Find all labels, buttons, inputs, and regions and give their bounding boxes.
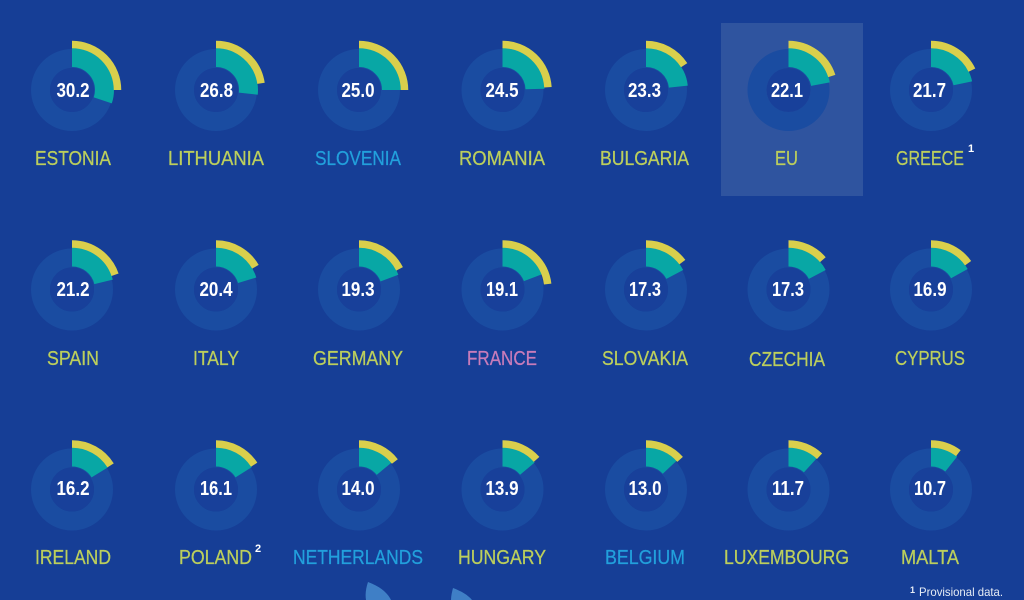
gauge: France (457, 244, 548, 370)
gauge: Netherlands: NETHERLANDS (293, 547, 423, 569)
gauge: Germany (313, 244, 404, 370)
gauge: Hungary (457, 444, 548, 569)
gauge: Italy: ITALY (193, 348, 239, 370)
gauge: Lithuania: LITHUANIA (168, 148, 265, 170)
gauge: Greece: 1 (968, 143, 974, 155)
gauge: Greece: GREECE (896, 148, 964, 170)
gauge: Poland: POLAND (179, 547, 252, 569)
gauge: Romania (457, 44, 548, 170)
footnote: 1 (910, 585, 915, 595)
gauge: Estonia: 30.2 (56, 80, 90, 102)
gauge: Poland: 2 (255, 543, 261, 555)
gauge: Romania: ROMANIA (459, 148, 546, 170)
gauge: France: FRANCE (467, 348, 537, 370)
gauge: Slovenia (314, 44, 404, 170)
gauge: Lithuania (168, 44, 265, 170)
gauge: Hungary: HUNGARY (458, 547, 546, 569)
gauge: France: 19.1 (486, 279, 518, 301)
gauge: EU: EU (775, 148, 798, 170)
gauge: Slovenia: SLOVENIA (315, 148, 402, 170)
gauge: Spain (26, 244, 118, 370)
gauge: Belgium: BELGIUM (605, 547, 685, 569)
gauge: Spain: 21.2 (56, 279, 90, 301)
gauge: Belgium (600, 444, 692, 569)
gauge: Malta (886, 444, 976, 569)
gauge: Bulgaria (600, 44, 692, 170)
gauge: Greece: 21.7 (913, 80, 946, 102)
gauge: Greece (886, 44, 976, 170)
gauge: EU (743, 44, 834, 170)
gauge: Slovakia: SLOVAKIA (602, 348, 689, 370)
gauge: Ireland: 16.2 (56, 478, 90, 500)
gauge: Ireland: IRELAND (35, 547, 111, 569)
gauge: Czechia: CZECHIA (749, 349, 826, 371)
gauge: Cyprus: CYPRUS (895, 348, 965, 370)
gauge: Hungary: 13.9 (486, 478, 518, 500)
gauge: Malta: 10.7 (914, 478, 946, 500)
gauge: Luxembourg (724, 444, 849, 569)
gauge: Estonia: ESTONIA (35, 148, 112, 170)
gauge: Luxembourg: 11.7 (772, 478, 804, 500)
gauge: Italy (170, 244, 262, 370)
gauge: EU: 22.1 (771, 80, 803, 102)
gauge: Germany: GERMANY (313, 348, 403, 370)
gauge: Poland: 16.1 (200, 478, 232, 500)
gauge: Ireland (26, 444, 118, 569)
gauge: Slovenia: 25.0 (342, 80, 374, 102)
gauge: Bulgaria: BULGARIA (600, 148, 690, 170)
gauge: Estonia (26, 44, 118, 170)
icon: leaf shapes (366, 582, 472, 600)
gauge: Italy: 20.4 (200, 279, 233, 301)
gauge: Luxembourg: LUXEMBOURG (724, 547, 849, 569)
gauge: Netherlands (293, 444, 423, 569)
gauge: Cyprus (886, 244, 976, 370)
gauge: Romania: 24.5 (486, 80, 518, 102)
gauge: Netherlands: 14.0 (342, 478, 374, 500)
gauge: Poland (170, 444, 262, 569)
gauge: Bulgaria: 23.3 (628, 80, 661, 102)
footnote: Provisional data. (919, 585, 1003, 599)
gauge: Germany: 19.3 (342, 279, 374, 301)
gauge: Slovakia (600, 244, 692, 370)
panel: EU highlight (721, 23, 863, 196)
gauge: Lithuania: 26.8 (200, 80, 233, 102)
gauge: Belgium: 13.0 (628, 478, 662, 500)
gauge: Malta: MALTA (901, 547, 960, 569)
gauge: Spain: SPAIN (47, 348, 99, 370)
gauge: Slovakia: 17.3 (629, 279, 661, 301)
gauge: Czechia (743, 244, 834, 371)
gauge: Czechia: 17.3 (772, 279, 804, 301)
gauge: Cyprus: 16.9 (914, 279, 946, 301)
